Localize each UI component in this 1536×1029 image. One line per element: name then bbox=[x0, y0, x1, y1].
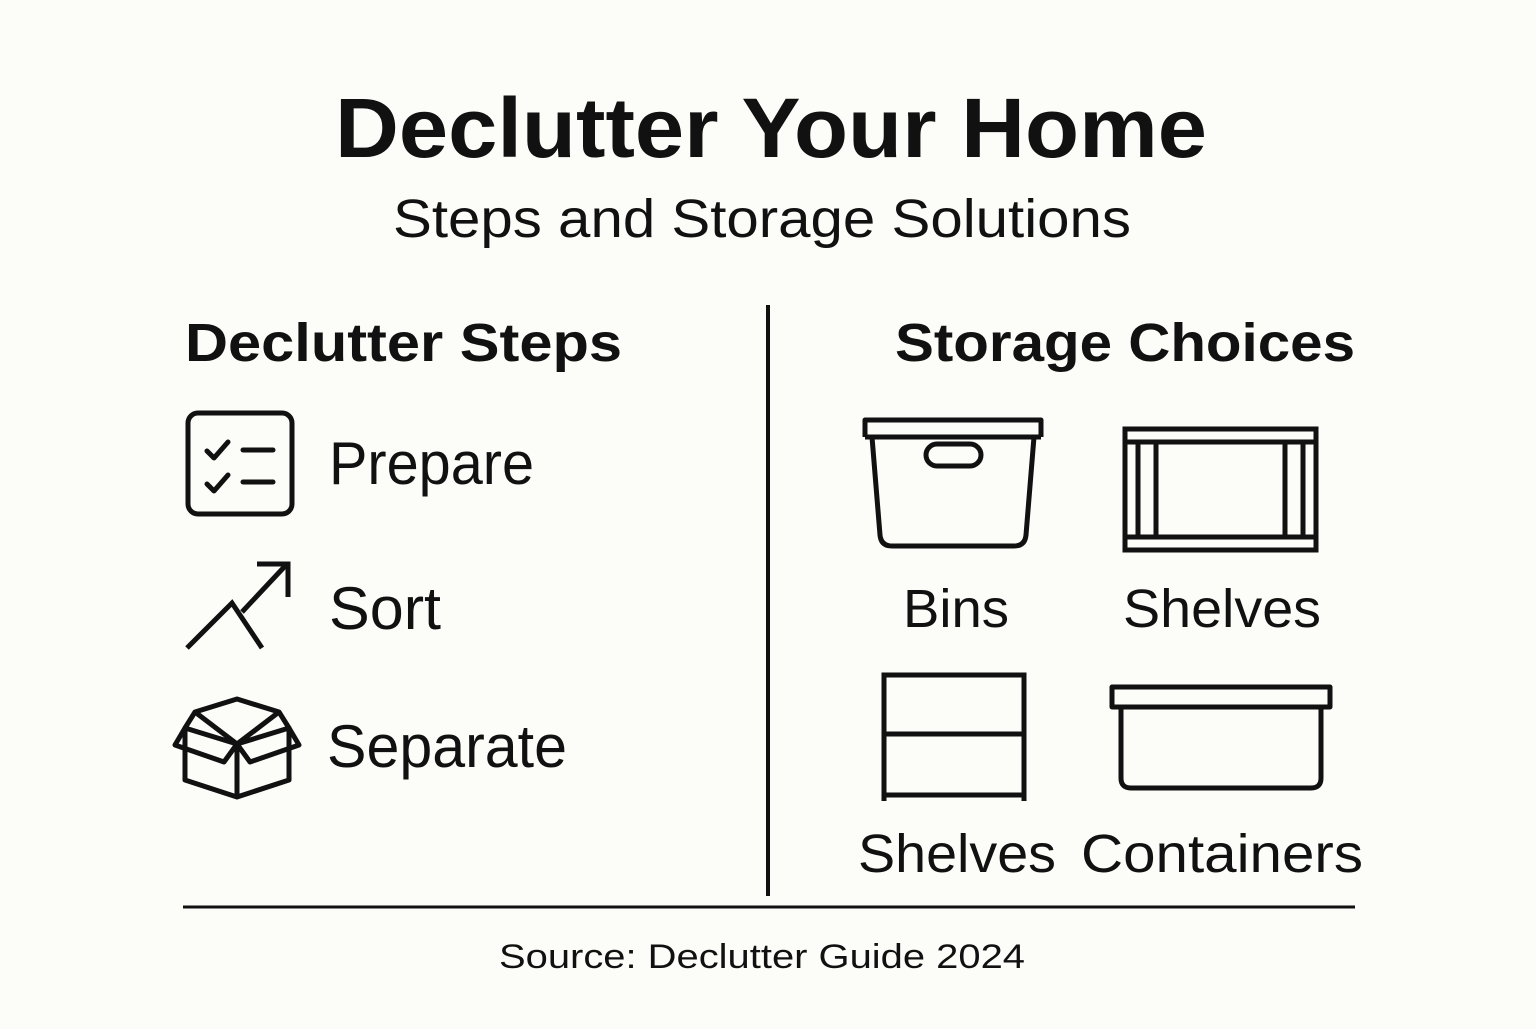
icon: shelves frame bbox=[1125, 429, 1316, 550]
panel: storage choices bbox=[858, 313, 1363, 884]
heading: Storage Choices: Storage Choices bbox=[895, 313, 1355, 373]
icon: bin bbox=[865, 420, 1041, 546]
text: Prepare: Prepare bbox=[329, 430, 534, 497]
icon: sort arrow bbox=[187, 564, 288, 648]
label: Bins: Bins bbox=[903, 579, 1009, 639]
label: Shelves: Shelves bbox=[1123, 579, 1321, 639]
panel: declutter steps bbox=[175, 313, 622, 797]
icon: open box bbox=[175, 699, 299, 797]
divider vertical bbox=[766, 305, 770, 896]
heading: Declutter Steps: Declutter Steps bbox=[185, 313, 622, 373]
divider horizontal bbox=[183, 906, 1355, 908]
label: Containers: Containers bbox=[1081, 824, 1363, 884]
text: Sort: Sort bbox=[329, 575, 441, 642]
icon: checklist bbox=[188, 413, 292, 514]
icon: shelf unit bbox=[884, 675, 1024, 801]
subtitle: Steps and Storage Solutions bbox=[393, 189, 1131, 249]
text: Separate: Separate bbox=[327, 713, 567, 780]
source: Source: Declutter Guide 2024 bbox=[499, 938, 1025, 976]
icon: container bbox=[1112, 687, 1330, 788]
title: Declutter Your Home bbox=[335, 81, 1207, 175]
label: Shelves 2: Shelves bbox=[858, 824, 1056, 884]
